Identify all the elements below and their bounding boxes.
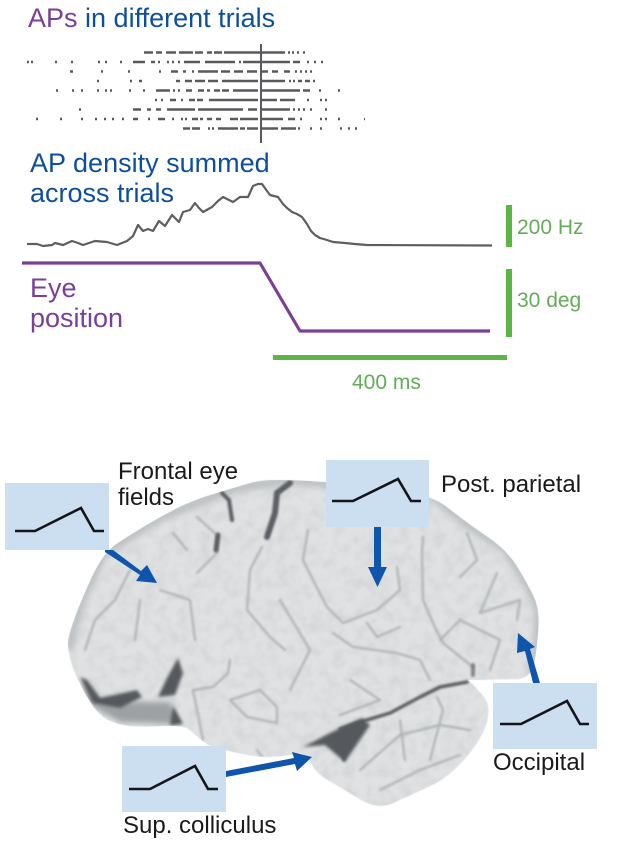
scale bar: 30 deg: 30 deg: [517, 289, 581, 312]
label: Post. parietal text: Post. parietal: [441, 471, 581, 498]
scale bar: 200 Hz: [506, 205, 584, 247]
scale bar: 400 ms: 400 ms: [352, 371, 421, 394]
panel: occipital firing profile: [493, 683, 597, 749]
dark sulci: [216, 483, 473, 760]
label: Eye position: position: [30, 303, 123, 333]
callout: Frontal eye fields: [5, 458, 238, 583]
label: Frontal eye fields text: Frontal eye: [118, 458, 238, 485]
arrow: to posterior parietal: [368, 527, 387, 587]
label: Eye position: Eye: [30, 273, 77, 303]
callout: Post. parietal: [326, 460, 581, 587]
callout: Occipital: [493, 633, 597, 776]
raster plot of action potentials: [27, 44, 365, 143]
brain illustration: [68, 480, 539, 806]
frontal pole shading: [78, 680, 180, 724]
callout: Sup. colliculus: [122, 746, 312, 839]
panel: colliculus firing profile: [122, 746, 226, 812]
line chart: eye position trace: [22, 263, 490, 331]
heading: AP density summed across trials: AP density summed: [30, 148, 270, 178]
heading: APs in different trials: APs in different trials: [28, 3, 275, 33]
arrow: to frontal eye fields: [105, 550, 157, 583]
scale bar: 400 ms: [273, 355, 507, 394]
scale bar: 200 Hz: 200 Hz: [517, 216, 584, 239]
line chart: AP density trace: [27, 184, 492, 246]
heading: AP density summed across trials: across trials: [30, 178, 174, 208]
panel: frontal firing profile: [5, 483, 109, 550]
fine sulci: [85, 517, 520, 790]
surface mottling: [74, 492, 516, 806]
panel: parietal firing profile: [326, 460, 429, 527]
arrow: to occipital: [517, 633, 540, 683]
label: Occipital text: Occipital: [493, 749, 585, 776]
shaded rim: [68, 480, 539, 677]
arrow: to superior colliculus: [226, 752, 312, 777]
dark fissures: [80, 658, 370, 762]
label: Frontal eye fields text: fields: [118, 484, 174, 511]
label: Sup. colliculus text: Sup. colliculus: [123, 812, 276, 839]
scale bar: 30 deg: [506, 269, 581, 337]
